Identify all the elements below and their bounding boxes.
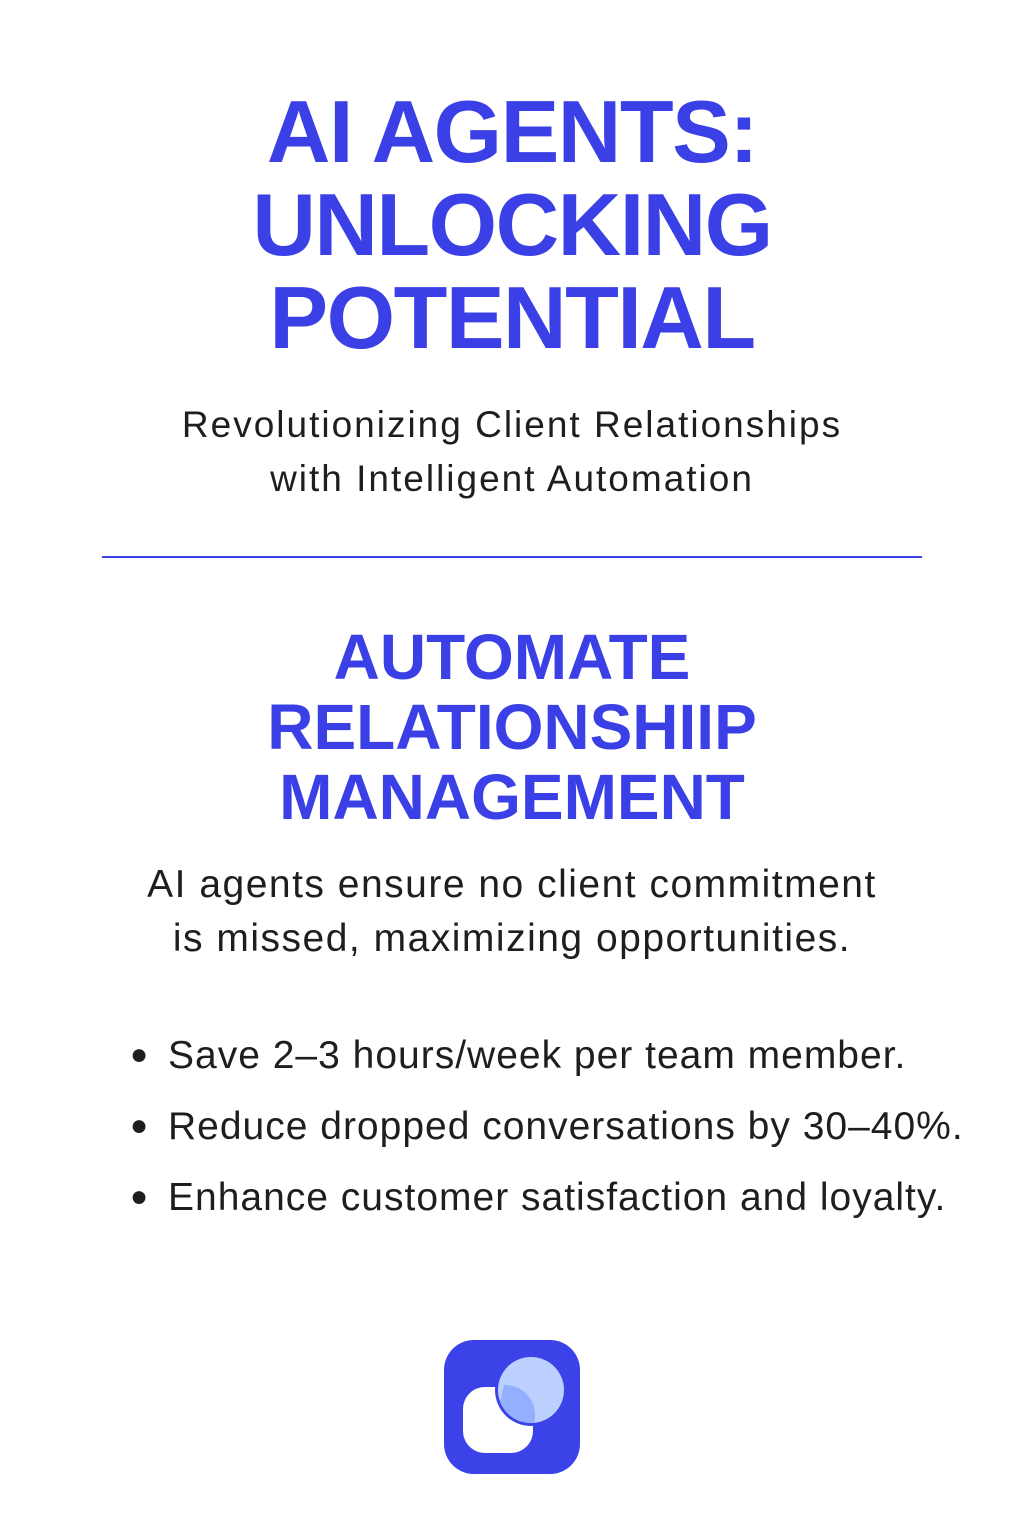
body text: is missed, maximizing opportunities. (173, 917, 851, 960)
icon: app logo (444, 1340, 580, 1474)
section heading (267, 621, 757, 833)
subtitle: with Intelligent Automation (270, 458, 754, 499)
bullet list: ● (130, 1038, 149, 1071)
section heading: MANAGEMENT (279, 761, 745, 833)
bullet list: Save 2–3 hours/week per team member. (168, 1034, 906, 1077)
bullet list: Enhance customer satisfaction and loyalty. (168, 1176, 946, 1219)
subtitle: Revolutionizing Client Relationships (182, 404, 842, 445)
title: AI AGENTS: (267, 82, 757, 181)
subtitle (182, 404, 842, 499)
title: POTENTIAL (269, 268, 755, 367)
bullet list: Reduce dropped conversations by 30–40%. (168, 1105, 964, 1148)
section heading: RELATIONSHIIP (267, 691, 757, 763)
title: UNLOCKING (252, 175, 772, 274)
bullet list: ● (130, 1109, 149, 1142)
body text: AI agents ensure no client commitment (147, 863, 877, 906)
section heading: AUTOMATE (334, 621, 690, 693)
bullet list: ● (130, 1180, 149, 1213)
title (252, 82, 772, 367)
body text (147, 863, 877, 960)
bullet list (130, 1034, 964, 1219)
